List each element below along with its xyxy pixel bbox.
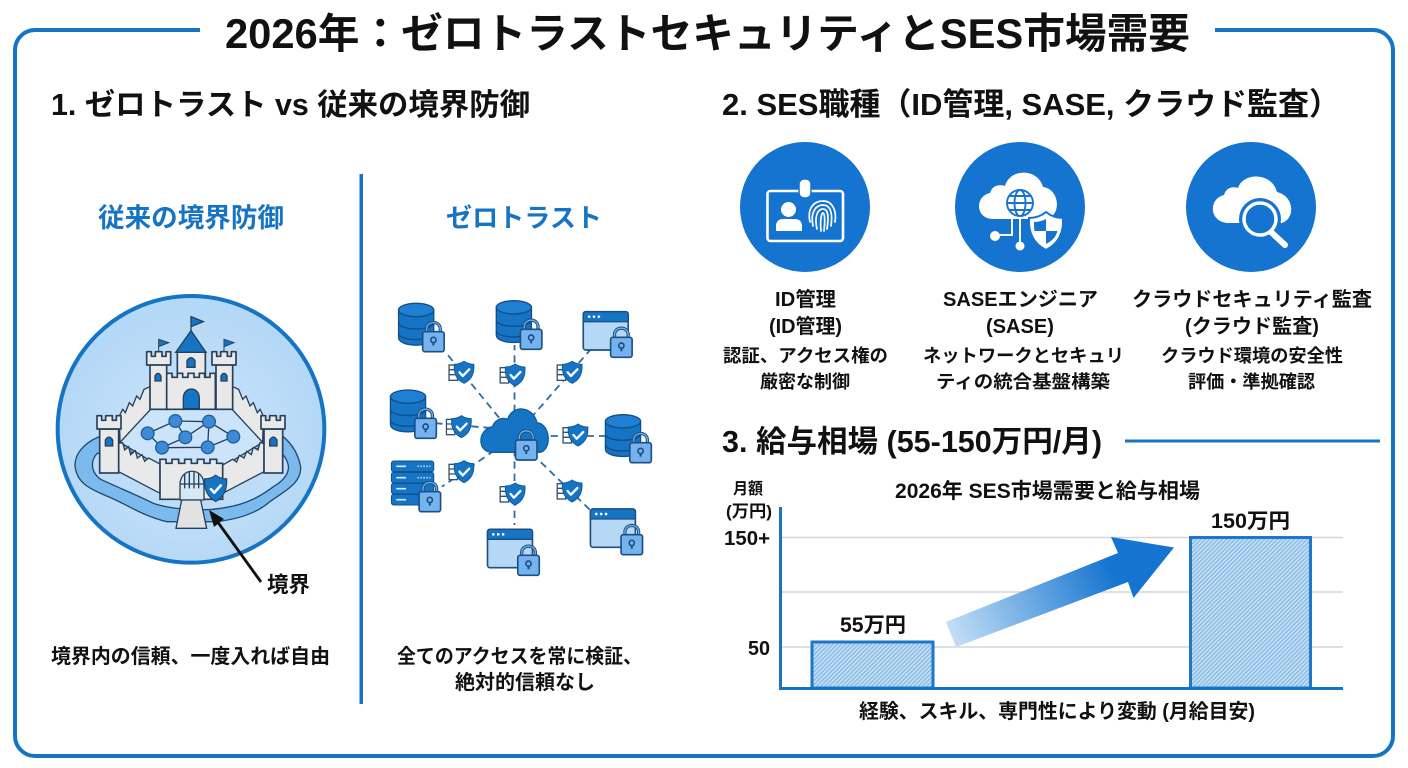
courtyard [120, 408, 263, 467]
caption: zero trust [397, 645, 642, 694]
verification shields [446, 361, 588, 505]
caption: zero trust: 絶対的信頼なし [455, 671, 595, 694]
side towers [97, 416, 285, 473]
growth arrow [946, 537, 1174, 647]
gatehouse [160, 459, 223, 528]
heading rule [1125, 440, 1380, 442]
text block: ID management: ID管理 [775, 288, 836, 311]
text block: cloud security audit: クラウド環境の安全性 [1161, 345, 1343, 366]
front walls [119, 443, 160, 493]
text block: SASE engineer [923, 289, 1124, 392]
text block: cloud security audit: 評価・準拠確認 [1188, 371, 1315, 392]
caption: zero trust: 全てのアクセスを常に検証、 [397, 645, 642, 668]
gate shield [205, 475, 227, 502]
divider between perimeter and zero trust [360, 174, 363, 704]
heading: section 3: 3. 給与相場 (55-150万円/月) [722, 425, 1102, 459]
dashed links [437, 345, 605, 525]
app windows [487, 312, 643, 575]
icon: ID management [740, 142, 870, 272]
text block: SASE engineer: ティの統合基盤構築 [936, 371, 1110, 392]
title: 2026年：ゼロトラストセキュリティとSES市場需要 [225, 10, 1190, 57]
heading: section 2: 2. SES職種（ID管理, SASE, クラウド監査） [722, 87, 1340, 122]
chart title: 2026年 SES市場需要と給与相場 [895, 480, 1200, 503]
text block: SASE engineer: (SASE) [986, 316, 1054, 338]
rear walls [119, 387, 150, 442]
y axis title: (万円) [726, 502, 772, 521]
y axis ticks: 150+ [724, 528, 770, 550]
grid lines [782, 538, 1343, 647]
subheading: zero trust: ゼロトラスト [446, 203, 602, 233]
text block: cloud security audit: (クラウド監査) [1185, 315, 1319, 338]
bar label: 55: 55万円 [840, 614, 906, 637]
bar: 55 [812, 642, 933, 688]
main building [167, 317, 215, 409]
chart note: 経験、スキル、専門性により変動 (月給目安) [859, 700, 1255, 723]
text block: ID management: 厳密な制御 [760, 371, 850, 392]
y axis title [726, 480, 772, 521]
y axis ticks: 50 [748, 638, 770, 660]
bar: 150 [1190, 538, 1310, 688]
illustration: zero trust network [390, 301, 651, 575]
text block: cloud security audit [1132, 288, 1372, 392]
subheading: perimeter defense: 従来の境界防御 [98, 203, 284, 233]
databases [390, 301, 651, 463]
central cloud with lock [481, 409, 548, 460]
icon: cloud audit [1186, 142, 1316, 272]
text block: SASE engineer: ネットワークとセキュリ [923, 345, 1124, 366]
moat [75, 435, 301, 522]
illustration: castle in moat [58, 296, 324, 563]
server rack [391, 461, 441, 512]
text block: ID management: (ID管理) [769, 315, 842, 338]
rear towers [147, 339, 236, 409]
caption: perimeter defense: 境界内の信頼、一度入れば自由 [51, 645, 330, 668]
arrow: to perimeter [209, 510, 261, 582]
text block: ID management: 認証、アクセス権の [723, 345, 888, 366]
heading: section 1: 1. ゼロトラスト vs 従来の境界防御 [51, 88, 530, 122]
chart: salary bar chart [724, 480, 1343, 688]
y axis ticks [724, 528, 770, 660]
text block: ID management [723, 288, 888, 392]
text block: cloud security audit: クラウドセキュリティ監査 [1132, 288, 1372, 311]
axes [780, 507, 1343, 688]
network nodes in courtyard [141, 415, 240, 454]
label: perimeter: 境界 [267, 573, 310, 597]
icon: SASE [955, 142, 1085, 272]
text block: SASE engineer: SASEエンジニア [943, 289, 1098, 311]
bar label: 150: 150万円 [1211, 510, 1290, 533]
y axis title: 月額 [733, 480, 763, 498]
